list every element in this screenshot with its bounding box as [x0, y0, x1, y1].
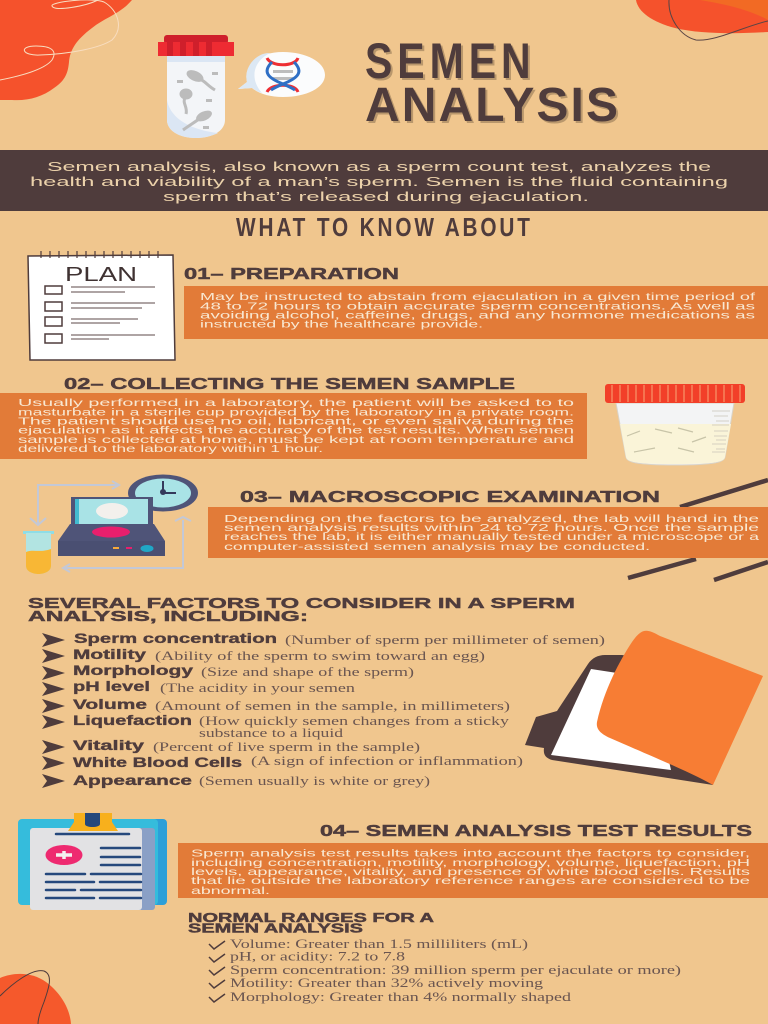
list: factors: (Semen usually is white or grey) — [199, 773, 430, 788]
list: factors — [42, 631, 605, 788]
title: ANALYSIS — [367, 81, 620, 134]
list: factors: Motility — [73, 647, 147, 662]
panel: preparation text: May be instructed to abstain from ejaculation in a given time period of — [200, 291, 755, 303]
icon: check marks — [209, 941, 225, 1002]
panel: macroscopic text: semen analysis results within 24 to 72 hours. Once the sample — [224, 522, 759, 534]
heading: normal ranges: NORMAL RANGES FOR A — [188, 910, 435, 925]
list: normal ranges — [209, 936, 681, 1004]
icon: sample cup — [605, 384, 745, 465]
list: factors: pH level — [73, 679, 150, 694]
section 02 — [0, 376, 587, 459]
panel: collecting text: ejaculation as it affects the accuracy of the test results. When semen — [18, 424, 574, 436]
list: factors: Vitality — [73, 738, 145, 753]
icon: test tube with sperm — [158, 35, 234, 138]
heading: several factors: ANALYSIS, INCLUDING: — [28, 608, 308, 625]
panel: collecting text: sample is collected at home, must be kept at room temperature and — [18, 434, 574, 446]
panel: collecting text: delivered to the laboratory within 1 hour. — [18, 443, 323, 455]
panel: test results text: Sperm analysis test results takes into account the factors to consider, — [191, 848, 750, 860]
list: factors: Sperm concentration — [74, 631, 277, 646]
list: normal ranges: pH, or acidity: 7.2 to 7.8 — [230, 948, 405, 964]
section 04: 04– SEMEN ANALYSIS TEST RESULTS — [320, 823, 752, 840]
decorative blob: top right — [636, 0, 768, 40]
list: factors: (Amount of semen in the sample, in millimeters) — [155, 698, 510, 713]
panel: preparation text — [184, 286, 768, 339]
decorative blob: top left — [0, 0, 132, 100]
heading: normal ranges: SEMEN ANALYSIS — [188, 920, 363, 936]
icon: plan notepad: PLAN — [65, 264, 137, 286]
list: factors: (Size and shape of the sperm) — [201, 664, 414, 679]
panel: macroscopic text: Depending on the factors to be analyzed, the lab will hand in the — [224, 513, 759, 525]
decorative blob: bottom left — [0, 971, 71, 1024]
icon: medical clipboard — [18, 813, 167, 910]
intro band — [0, 150, 768, 211]
panel: test results text: that lie outside the laboratory reference ranges are considered to be — [191, 875, 750, 887]
section 01 — [184, 266, 768, 339]
panel: collecting text: The patient should use no oil, lubricant, or even saliva during the — [18, 416, 574, 428]
panel: test results text — [178, 843, 768, 898]
list: factors: Appearance — [73, 773, 193, 788]
intro band: health and viability of a man’s sperm. Semen is the fluid containing — [30, 174, 728, 189]
heading: several factors: SEVERAL FACTORS TO CONSIDER IN A SPERM — [28, 595, 575, 612]
list: factors: Liquefaction — [73, 713, 192, 728]
heading: what to know about: WHAT TO KNOW ABOUT — [236, 213, 531, 242]
decorative diagonal strokes — [628, 480, 768, 580]
list: normal ranges: Volume: Greater than 1.5 milliliters (mL) — [230, 936, 528, 951]
section 01: 01– PREPARATION — [184, 266, 399, 283]
panel: collecting text: masturbate in a sterile cup provided by the laboratory in a private room. — [18, 406, 574, 418]
list: factors: Volume — [73, 697, 148, 712]
panel: collecting text: Usually performed in a laboratory, the patient will be asked to to — [18, 397, 574, 409]
panel: macroscopic text: computer-assisted semen analysis may be conducted. — [224, 541, 650, 553]
list: factors: (A sign of infection or inflammation) — [251, 753, 523, 768]
icon: orange folder clipboard — [525, 631, 763, 785]
panel: preparation text: avoiding alcohol, caffeine, drugs, and any hormone medications as — [200, 310, 755, 322]
list: normal ranges: Morphology: Greater than 4% normally shaped — [230, 989, 572, 1004]
list: normal ranges: Motility: Greater than 32% actively moving — [230, 975, 544, 990]
list: factors: (Percent of live sperm in the sample) — [153, 739, 420, 754]
panel: preparation text: instructed by the healthcare provide. — [200, 318, 483, 330]
list: factors: (Number of sperm per millimeter of semen) — [285, 632, 605, 647]
panel: macroscopic text — [208, 507, 768, 558]
panel: preparation text: 48 to 72 hours to obtain accurate sperm concentrations. As well as — [200, 300, 755, 312]
list: factors: White Blood Cells — [73, 755, 242, 770]
icon: bullet arrows — [42, 633, 65, 788]
section 02: 02– COLLECTING THE SEMEN SAMPLE — [64, 376, 515, 393]
heading: several factors — [28, 595, 575, 625]
list: factors: (How quickly semen changes from a sticky — [199, 713, 510, 728]
intro band: Semen analysis, also known as a sperm count test, analyzes the — [47, 159, 711, 174]
intro band: sperm that’s released during ejaculation. — [163, 189, 589, 204]
list: factors: (Ability of the sperm to swim toward an egg) — [155, 648, 485, 663]
heading: normal ranges — [188, 910, 435, 936]
title: SEMEN — [367, 35, 533, 91]
list: factors: (The acidity in your semen — [160, 680, 356, 695]
title: SEMEN — [365, 33, 531, 89]
section 04 — [178, 823, 768, 898]
icon: laboratory machine with clock — [23, 474, 198, 574]
list: normal ranges: Sperm concentration: 39 million sperm per ejaculate or more) — [230, 962, 681, 977]
icon: DNA speech bubble — [238, 52, 325, 97]
section 03: 03– MACROSCOPIC EXAMINATION — [240, 489, 660, 506]
panel: test results text: including concentration, motility, morphology, volume, liquefaction, pH — [191, 857, 750, 869]
title — [365, 33, 620, 134]
title: ANALYSIS — [365, 79, 618, 132]
panel: collecting text — [0, 393, 587, 459]
icon: plan notepad — [28, 251, 175, 360]
panel: macroscopic text: reaches the lab, it is either manually tested under a microscope or a — [224, 531, 759, 543]
panel: test results text: levels, appearance, vitality, and presence of white blood cells. Results — [191, 866, 750, 878]
list: factors: substance to a liquid — [199, 725, 344, 740]
section 03 — [208, 489, 768, 558]
list: factors: Morphology — [73, 663, 194, 678]
panel: test results text: abnormal. — [191, 885, 270, 897]
